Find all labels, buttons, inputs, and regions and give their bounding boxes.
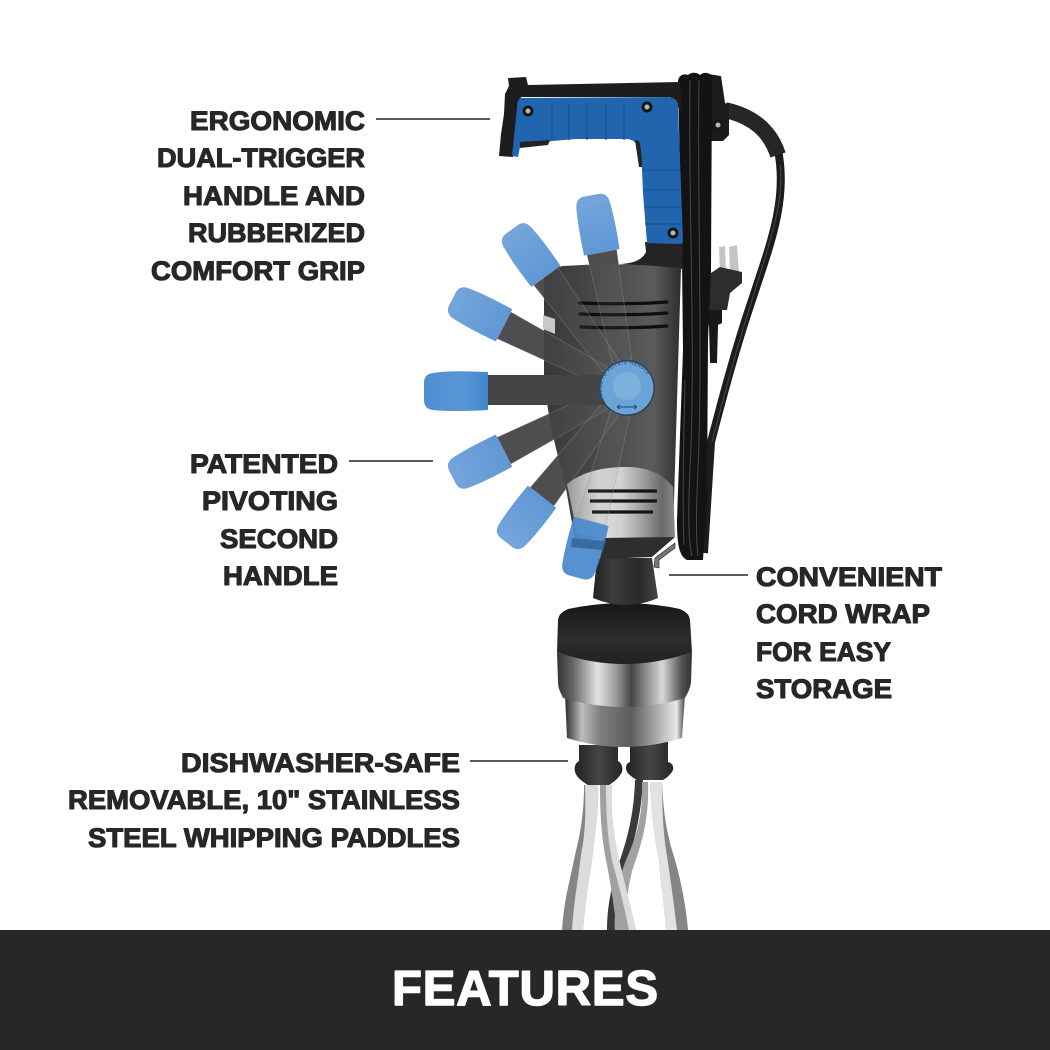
callout: cord wrap: STORAGE — [756, 674, 892, 704]
upper steel ring — [557, 652, 692, 707]
cord clip tab — [708, 74, 729, 141]
dark band on lowest grip — [571, 538, 606, 550]
callout: ergonomic handle — [151, 106, 490, 286]
handle position: horizontal — [424, 371, 605, 411]
grip ribs — [552, 104, 682, 224]
handle grip: 27 degrees up — [444, 283, 512, 342]
paddle sockets — [575, 741, 673, 785]
callout: cord wrap: CONVENIENT — [756, 562, 943, 592]
callout: whipping paddles: STEEL WHIPPING PADDLES — [88, 823, 460, 853]
callout: ergonomic handle: HANDLE AND — [183, 181, 365, 211]
dark collar — [600, 537, 675, 559]
handle black frame — [499, 77, 682, 157]
steel band — [567, 467, 675, 539]
handle grip: 27 degrees down — [444, 434, 512, 493]
callout: cord wrap — [669, 562, 943, 704]
screws — [522, 102, 724, 238]
callout: ergonomic handle: RUBBERIZED — [188, 218, 365, 248]
handle lower black neck — [620, 242, 683, 269]
pivoting second handle positions — [424, 192, 637, 582]
power plug — [705, 245, 742, 363]
callout: whipping paddles — [68, 748, 568, 853]
callout: cord wrap: FOR EASY — [756, 637, 891, 667]
handle grip: 75 degrees down — [559, 517, 609, 582]
trigger — [520, 140, 642, 167]
callout: pivoting second handle: SECOND — [220, 524, 338, 554]
main handle — [499, 77, 724, 269]
callout: pivoting second handle: PIVOTING — [202, 486, 338, 516]
whipping paddles — [562, 780, 688, 930]
callout: ergonomic handle: COMFORT GRIP — [151, 256, 365, 286]
black rubber cap — [557, 603, 692, 664]
handle grip: 52 degrees down — [492, 485, 556, 554]
callout: ergonomic handle: ERGONOMIC — [190, 106, 365, 136]
callout: pivoting second handle: PATENTED — [190, 449, 338, 479]
power cord — [704, 110, 781, 553]
pivot button: PRESS TO ROTATE HANDLE — [598, 361, 650, 400]
callout: pivoting second handle: HANDLE — [223, 561, 338, 591]
callout: cord wrap: CORD WRAP — [756, 599, 930, 629]
handle blue overmould — [512, 97, 683, 244]
blending head — [557, 603, 692, 747]
upper vents — [580, 302, 667, 328]
motor body — [543, 264, 681, 568]
handle grip: 79 degrees up — [573, 192, 620, 256]
side latch — [543, 315, 555, 334]
callout: pivoting second handle — [190, 449, 433, 591]
callout: whipping paddles: REMOVABLE, 10" STAINLESS — [68, 785, 460, 815]
handle grip: 54 degrees up — [497, 219, 561, 287]
callout: whipping paddles: DISHWASHER-SAFE — [181, 748, 460, 778]
bottom banner — [0, 930, 1050, 1050]
banner heading: FEATURES — [392, 962, 658, 1016]
pivot button — [598, 360, 655, 416]
cord wrap clip — [654, 543, 675, 568]
arm ghost outlines over the body — [497, 250, 637, 525]
callout: ergonomic handle: DUAL-TRIGGER — [157, 143, 365, 173]
neck — [593, 558, 658, 605]
wrapped cord bundle — [677, 73, 712, 560]
lower steel collar — [565, 695, 685, 747]
pivoting handle arms behind the body — [497, 250, 637, 506]
steel vents — [588, 491, 657, 512]
